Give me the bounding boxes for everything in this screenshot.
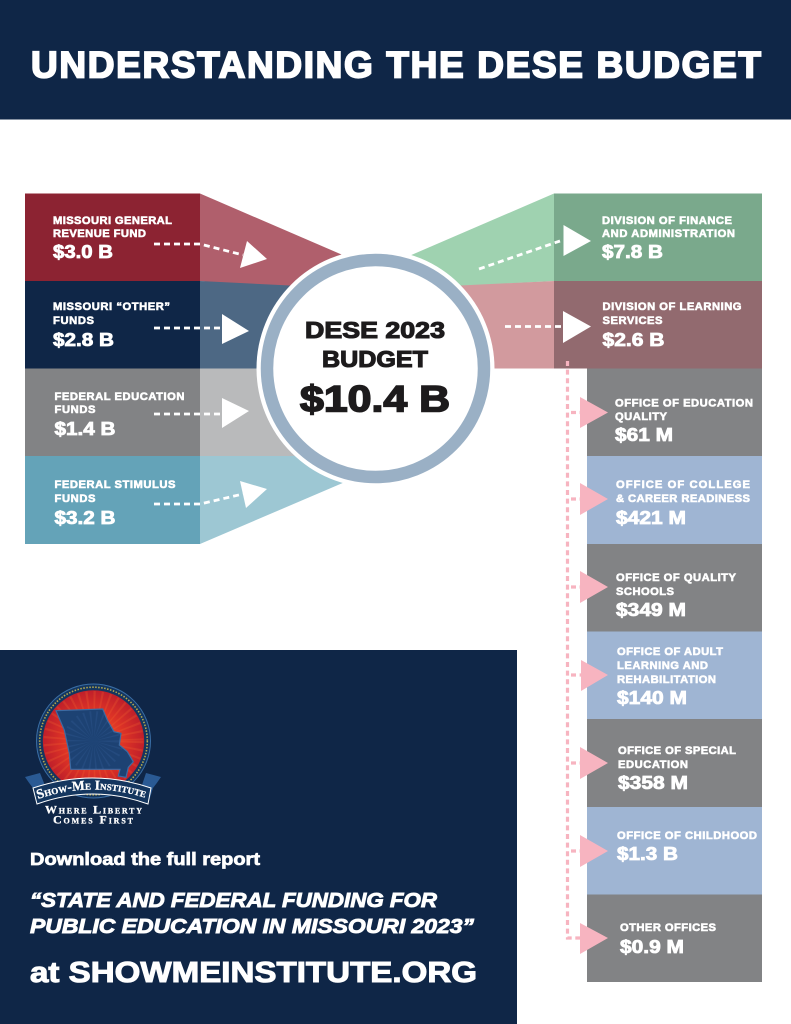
report title: “STATE AND FEDERAL FUNDING FOR xyxy=(30,889,437,912)
office: Childhood: OFFICE OF CHILDHOOD xyxy=(617,830,757,842)
office: College and Career Readiness: & CAREER READINESS xyxy=(616,493,751,505)
office: Education Quality: QUALITY xyxy=(615,411,668,423)
arrow: budget to learning services xyxy=(505,311,591,343)
logo: Show-Me Institute xyxy=(25,684,161,826)
office: Adult Learning and Rehabilitation xyxy=(587,632,762,719)
destination: Division of Learning Services xyxy=(554,281,762,368)
office: Adult Learning and Rehabilitation: LEARNING AND xyxy=(617,660,708,672)
pink dashed connector with office arrows xyxy=(568,361,608,954)
source: Missouri Other Funds: $2.8 B xyxy=(53,330,114,350)
website link text: at SHOWMEINSTITUTE.ORG xyxy=(30,957,477,989)
source: Missouri General Revenue Fund xyxy=(25,194,200,281)
office: Quality Schools: $349 M xyxy=(616,600,686,620)
office: College and Career Readiness: OFFICE OF COLLEGE xyxy=(616,479,751,491)
source: Federal Stimulus Funds: $3.2 B xyxy=(54,508,116,528)
budget total circle xyxy=(256,250,494,488)
source: Federal Education Funds xyxy=(25,368,200,456)
source: Missouri General Revenue Fund: REVENUE FUND xyxy=(53,228,146,240)
source: Federal Stimulus Funds: FEDERAL STIMULUS xyxy=(54,479,176,491)
office: Education Quality: OFFICE OF EDUCATION xyxy=(615,398,753,410)
arrow: federal stimulus to budget xyxy=(154,481,267,508)
arrow: general revenue to budget xyxy=(154,241,267,268)
download text: Download the full report xyxy=(30,849,260,869)
call to action panel xyxy=(0,650,517,1024)
office: Other Offices: OTHER OFFICES xyxy=(620,922,717,934)
budget total circle: DESE 2023 xyxy=(305,317,445,343)
office: Education Quality xyxy=(587,368,762,456)
source: Federal Education Funds: FEDERAL EDUCATION xyxy=(54,391,184,403)
office: Quality Schools: SCHOOLS xyxy=(616,586,675,598)
source: Federal Education Funds: $1.4 B xyxy=(54,419,116,439)
office: Other Offices: $0.9 M xyxy=(620,937,684,957)
report title: PUBLIC EDUCATION IN MISSOURI 2023” xyxy=(30,915,475,938)
header banner xyxy=(0,0,791,120)
destination: Division of Learning Services: $2.6 B xyxy=(602,330,664,350)
budget total circle: BUDGET xyxy=(322,346,428,372)
destination: Division of Finance and Administration xyxy=(554,194,762,281)
report title xyxy=(30,889,475,938)
office: Quality Schools: OFFICE OF QUALITY xyxy=(616,572,737,584)
source: Missouri Other Funds: FUNDS xyxy=(53,315,95,327)
logo: Show-Me Institute: Show-Me Institute xyxy=(36,780,146,799)
budget total circle: $10.4 B xyxy=(300,378,450,420)
office: Education Quality: $61 M xyxy=(615,425,673,445)
office: Other Offices xyxy=(587,894,762,982)
office: Special Education xyxy=(587,719,762,807)
office: Special Education: OFFICE OF SPECIAL xyxy=(618,745,736,757)
office: Quality Schools xyxy=(587,544,762,632)
arrow: federal education to budget xyxy=(154,398,249,428)
office: Adult Learning and Rehabilitation: $140 M xyxy=(617,688,687,708)
source: Missouri General Revenue Fund: $3.0 B xyxy=(53,242,113,262)
destination: Division of Finance and Administration: DIVISION OF FINANCE xyxy=(602,215,733,227)
office: Childhood xyxy=(587,807,762,894)
source: Missouri General Revenue Fund: MISSOURI GENERAL xyxy=(53,215,172,227)
office: Special Education: EDUCATION xyxy=(618,759,688,771)
office: Adult Learning and Rehabilitation: OFFICE OF ADULT xyxy=(617,646,723,658)
source: Federal Education Funds: FUNDS xyxy=(54,404,96,416)
office: College and Career Readiness: $421 M xyxy=(616,508,686,528)
destination: Division of Finance and Administration: $7.8 B xyxy=(602,242,663,262)
office: College and Career Readiness xyxy=(587,456,762,544)
destination: Division of Finance and Administration: AND ADMINISTRATION xyxy=(602,228,735,240)
logo: Show-Me Institute: Where Liberty xyxy=(45,802,142,816)
office: Special Education: $358 M xyxy=(618,773,688,793)
title: UNDERSTANDING THE DESE BUDGET xyxy=(31,44,761,86)
office: Childhood: $1.3 B xyxy=(617,844,678,864)
office: Adult Learning and Rehabilitation: REHABILITATION xyxy=(617,674,716,686)
source: Federal Stimulus Funds: FUNDS xyxy=(54,493,96,505)
source: Missouri Other Funds: MISSOURI “OTHER” xyxy=(53,301,170,313)
logo: Show-Me Institute: Comes First xyxy=(53,812,134,826)
source: Missouri Other Funds xyxy=(25,281,200,368)
funnel shapes into budget circle xyxy=(200,194,554,544)
arrow: other funds to budget xyxy=(154,314,249,344)
destination: Division of Learning Services: SERVICES xyxy=(602,315,663,327)
source: Federal Stimulus Funds xyxy=(25,456,200,544)
arrow: budget to finance division xyxy=(479,225,591,269)
destination: Division of Learning Services: DIVISION OF LEARNING xyxy=(602,301,742,313)
